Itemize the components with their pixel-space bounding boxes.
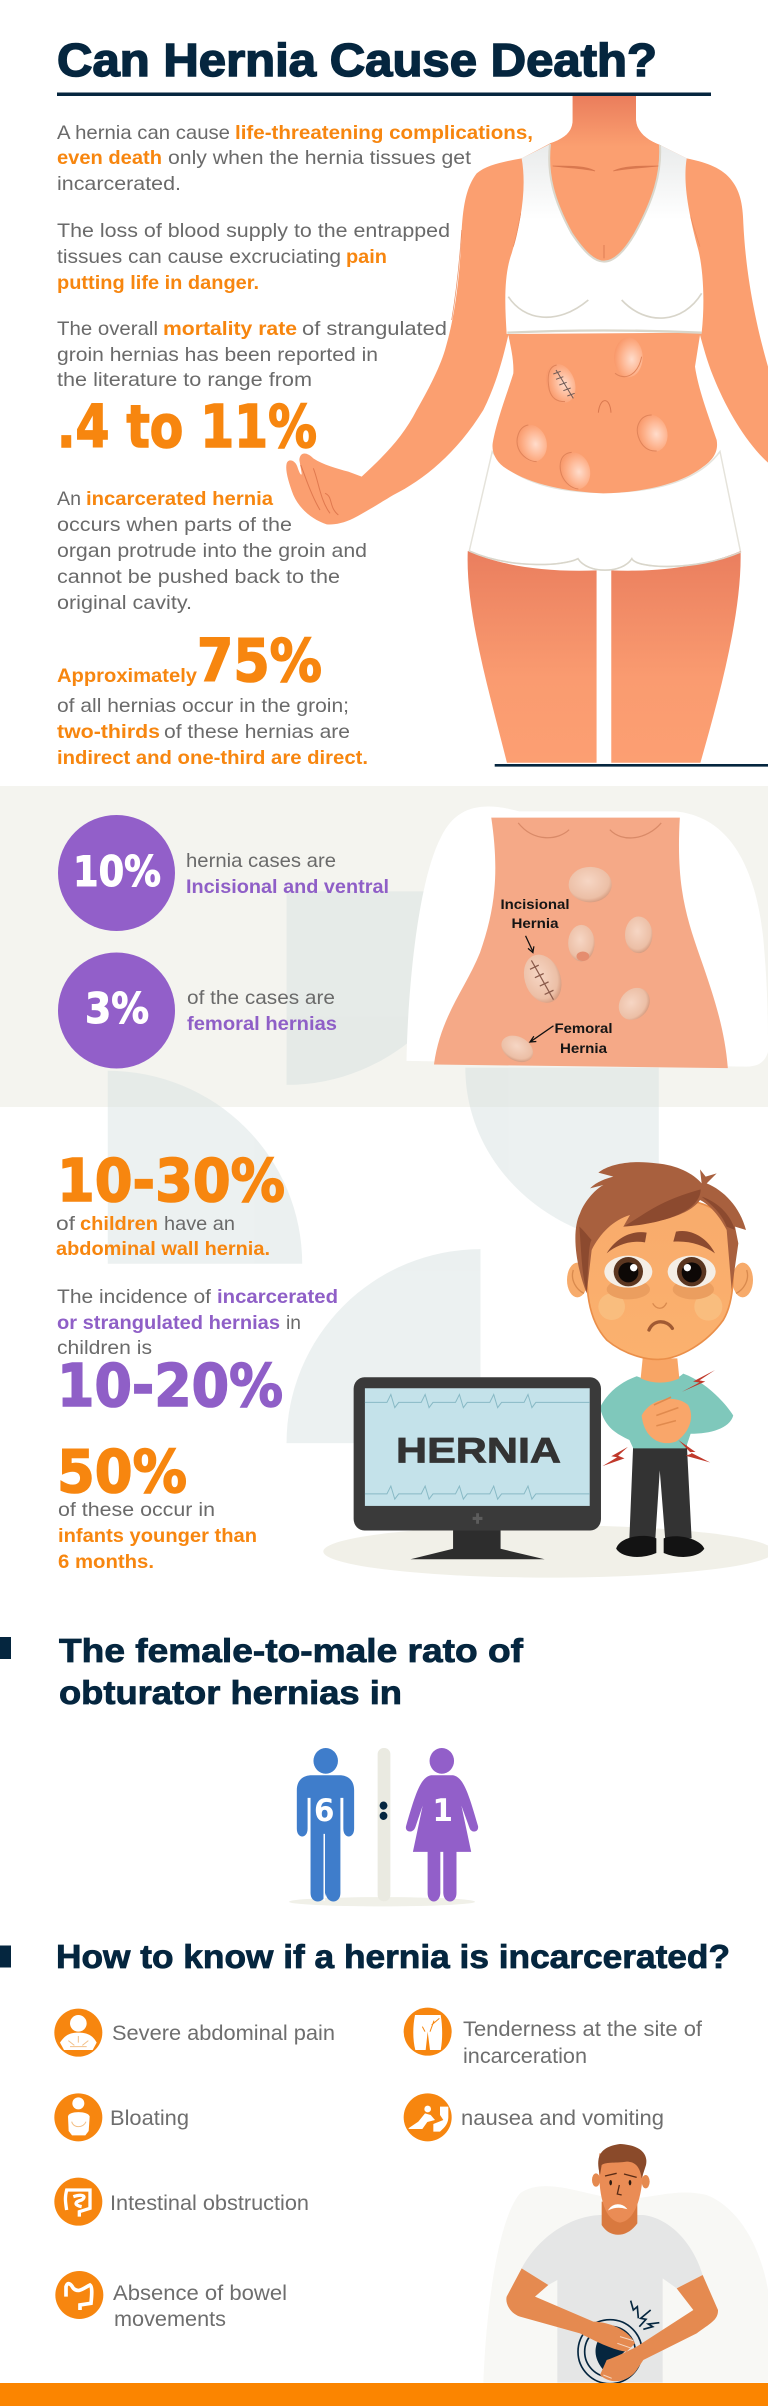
illustration: abdomen with labelled hernias: Incisional (500, 896, 570, 912)
text: incisional and ventral (186, 850, 389, 898)
text block: mortality rate: groin hernias has been reported in (57, 344, 378, 366)
text block: mortality rate: the literature to range from (57, 369, 312, 391)
text: children abdominal wall hernia: of (56, 1213, 76, 1235)
text: incidence in children: in (286, 1312, 301, 1334)
text block: blood supply: The loss of blood supply to the entrapped (57, 220, 450, 242)
badge: 3% (58, 952, 175, 1068)
text block: blood supply (57, 220, 450, 294)
text block: groin hernias: of these hernias are (164, 721, 350, 743)
text block: groin hernias (57, 695, 368, 769)
statistic: 10-30%: 10-30% (57, 1146, 285, 1215)
title: Can Hernia Cause Death? (57, 34, 657, 86)
text block: incarcerated hernia: organ protrude into the groin and (57, 540, 367, 562)
text block: mortality rate: mortality rate (163, 318, 297, 340)
symptom: bloating: Bloating (110, 2107, 189, 2130)
title underline (57, 92, 711, 96)
statistic: approximately 75%: 75% (197, 626, 322, 695)
text block: mortality rate: The overall (57, 318, 158, 340)
statistic: approximately 75%: Approximately (57, 665, 197, 687)
symptom: bloating (54, 2093, 189, 2141)
text block: complications: A hernia can cause (57, 122, 230, 144)
text: femoral hernias: of the cases are (187, 987, 335, 1009)
text block: incarcerated hernia: incarcerated hernia (86, 488, 273, 510)
text block: blood supply: putting life in danger. (57, 272, 259, 294)
footer bar (0, 2383, 768, 2406)
badge: 3%: 3% (85, 984, 149, 1033)
chart: 6 to 1 ratio figures (289, 1748, 478, 1906)
text: infants: infants younger than (58, 1525, 257, 1547)
symptom: absence of bowel movements: Absence of bowel (113, 2282, 287, 2305)
text: children abdominal wall hernia: children (80, 1213, 158, 1235)
text block: blood supply: pain (346, 246, 387, 268)
text: infants (58, 1499, 257, 1573)
illustration: abdomen with labelled hernias (407, 807, 768, 1068)
chart: 6 to 1 ratio figures: 6 (314, 1793, 334, 1829)
text block: groin hernias: of all hernias occur in the groin; (57, 695, 349, 717)
text: infants: of these occur in (58, 1499, 215, 1521)
text block: complications: even death (57, 147, 162, 169)
text block: complications: life-threatening complications, (235, 122, 533, 144)
text: incidence in children (57, 1286, 338, 1359)
text: children abdominal wall hernia: have an (164, 1213, 235, 1235)
text block: groin hernias: two-thirds (57, 721, 160, 743)
illustration: man with abdominal pain (483, 2144, 768, 2384)
text block: incarcerated hernia: cannot be pushed back to the (57, 566, 340, 588)
text block: complications (57, 122, 533, 195)
illustration: abdomen with labelled hernias: Hernia (512, 915, 559, 931)
decorative background shapes (108, 891, 659, 1443)
illustration: woman with abdominal hernias (286, 96, 768, 765)
text: incisional and ventral: Incisional and ventral (186, 876, 389, 898)
chart: 6 to 1 ratio figures: 1 (433, 1793, 453, 1829)
text block: mortality rate: of strangulated (302, 318, 447, 340)
text block: groin hernias: indirect and one-third are direct. (57, 747, 368, 769)
text: incidence in children: children is (57, 1337, 152, 1359)
text block: incarcerated hernia: An (57, 488, 81, 510)
illustration: boy with monitor (323, 1162, 768, 1578)
section marker (0, 1637, 11, 1659)
text: children abdominal wall hernia (56, 1213, 270, 1260)
symptom: intestinal obstruction (54, 2178, 309, 2226)
statistic: .4 to 11%: .4 to 11% (57, 392, 317, 461)
text: infants: 6 months. (58, 1551, 154, 1573)
text block: blood supply: tissues can cause excruciating (57, 246, 341, 268)
section marker (0, 1946, 11, 1968)
text: children abdominal wall hernia: abdominal wall hernia. (56, 1238, 270, 1260)
text: incidence in children: incarcerated (217, 1286, 338, 1308)
symptom: severe abdominal pain: Severe abdominal pain (112, 2022, 335, 2045)
text: femoral hernias: femoral hernias (187, 1013, 337, 1035)
text block: incarcerated hernia: occurs when parts of the (57, 514, 292, 536)
text block: incarcerated hernia (57, 488, 367, 614)
heading: obturator ratio (59, 1632, 524, 1711)
statistic: approximately 75% (57, 626, 322, 695)
text block: complications: only when the hernia tissues get (168, 147, 472, 169)
symptom: tenderness: Tenderness at the site of (463, 2018, 702, 2041)
text: femoral hernias (187, 987, 337, 1035)
heading: how to know: How to know if a hernia is incarcerated? (56, 1938, 730, 1975)
text block: complications: incarcerated. (57, 173, 181, 195)
background band (0, 786, 768, 1107)
badge: 10%: 10% (73, 847, 161, 896)
symptom: severe abdominal pain (54, 2009, 335, 2057)
heading: obturator ratio: obturator hernias in (59, 1674, 402, 1711)
statistic: 10-20%: 10-20% (57, 1351, 283, 1420)
illustration: boy with monitor: HERNIA (396, 1432, 561, 1470)
illustration: abdomen with labelled hernias: Femoral (554, 1020, 612, 1036)
text: incidence in children: The incidence of (57, 1286, 212, 1308)
statistic: 50%: 50% (57, 1437, 187, 1506)
text block: incarcerated hernia: original cavity. (57, 592, 192, 614)
illustration: abdomen with labelled hernias: Hernia (560, 1040, 607, 1056)
symptom: tenderness (404, 2008, 702, 2068)
text block: mortality rate (57, 318, 447, 391)
symptom: absence of bowel movements: movements (114, 2308, 226, 2331)
badge: 10% (58, 815, 175, 931)
text: incisional and ventral: hernia cases are (186, 850, 336, 872)
text: incidence in children: or strangulated hernias (57, 1312, 280, 1334)
symptom: tenderness: incarceration (463, 2045, 587, 2068)
symptom: absence of bowel movements (55, 2271, 287, 2331)
heading: obturator ratio: The female-to-male rato of (59, 1632, 524, 1669)
symptom: nausea and vomiting (404, 2093, 664, 2141)
symptom: nausea and vomiting: nausea and vomiting (461, 2107, 664, 2130)
symptom: intestinal obstruction: Intestinal obstruction (110, 2192, 309, 2215)
